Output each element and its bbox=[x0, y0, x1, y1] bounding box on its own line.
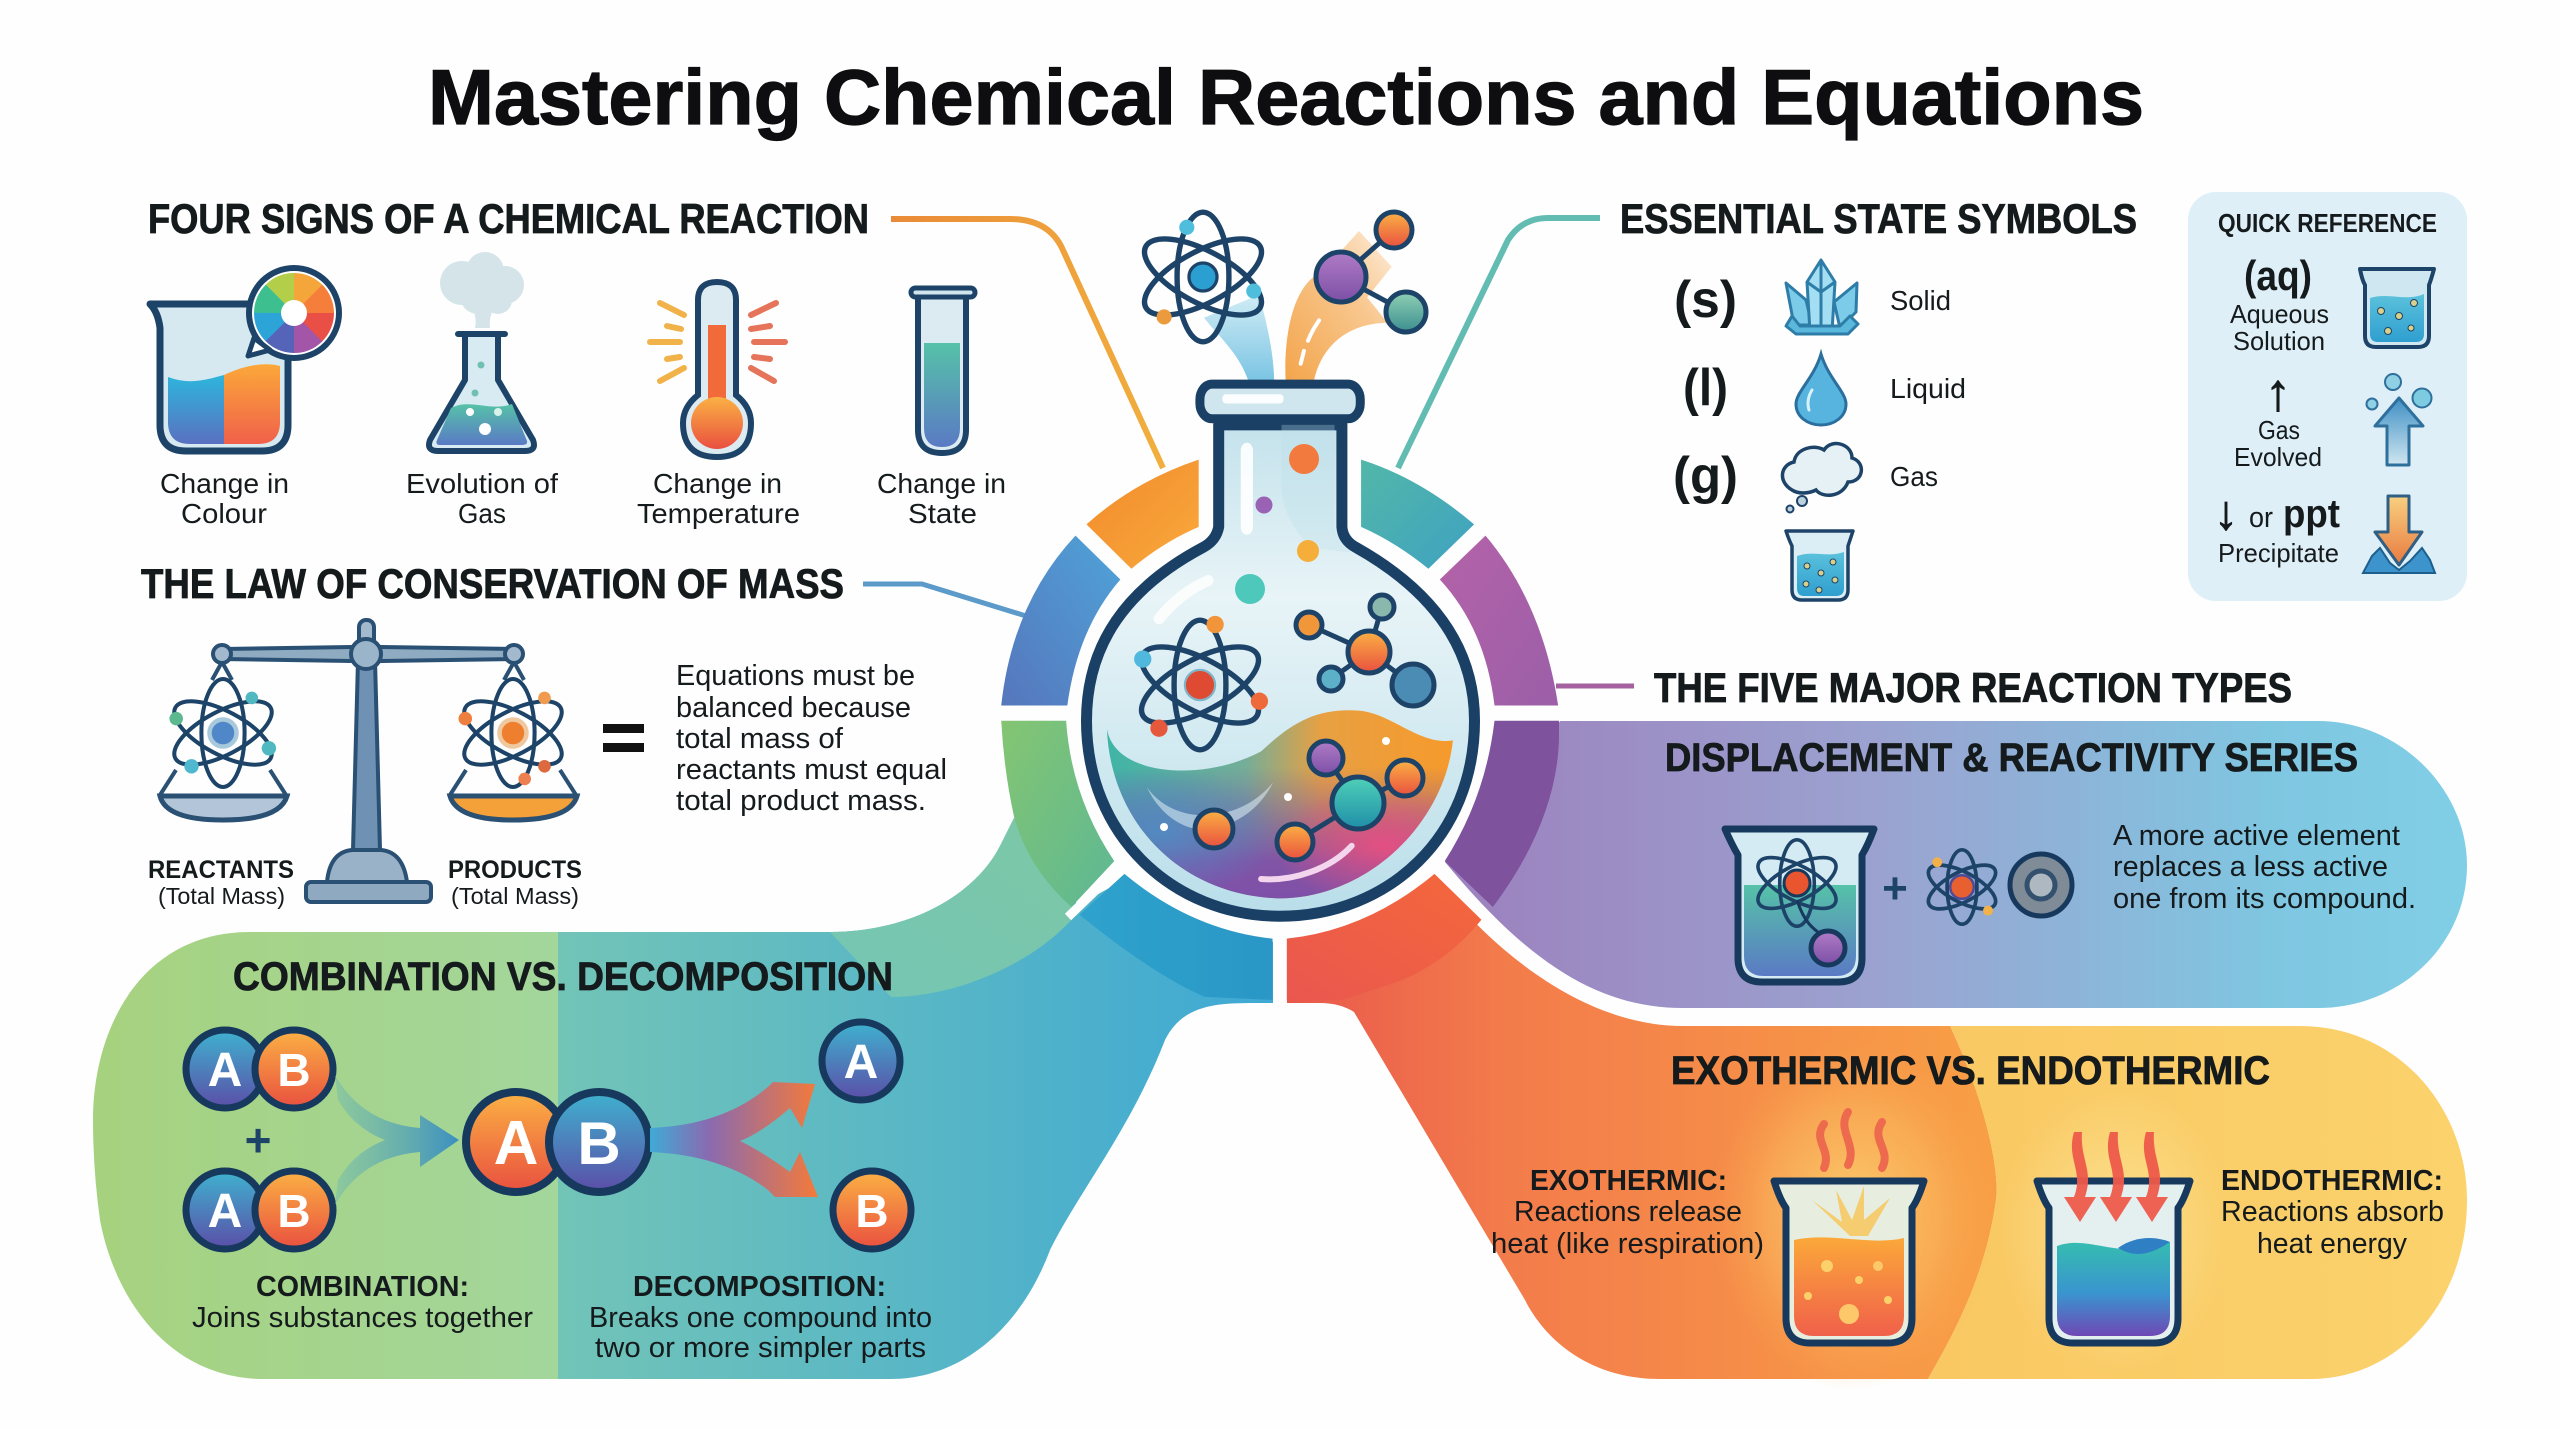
icon: cloud bbox=[1782, 444, 1861, 512]
label: Gas bbox=[458, 498, 506, 529]
gas evolved symbol bbox=[2234, 364, 2322, 472]
endothermic text bbox=[2221, 1165, 2444, 1260]
label: Solid bbox=[1890, 285, 1951, 316]
label: Change in bbox=[653, 468, 782, 499]
description: replaces a less active bbox=[2113, 851, 2388, 883]
precipitate symbol bbox=[2214, 487, 2340, 568]
aqueous symbol: Aqueous bbox=[2230, 299, 2329, 329]
combination text: Joins substances together bbox=[192, 1302, 533, 1334]
precipitate symbol: ppt bbox=[2283, 492, 2340, 536]
exothermic text: Reactions release bbox=[1514, 1196, 1742, 1228]
leader line: reaction types bbox=[1556, 684, 1634, 688]
panel: exothermic vs endothermic bbox=[1287, 876, 2467, 1390]
combination text: COMBINATION: bbox=[256, 1271, 469, 1303]
products label: PRODUCTS bbox=[448, 856, 582, 884]
icon: small aqueous beaker bbox=[1786, 531, 1853, 600]
description: one from its compound. bbox=[2113, 883, 2416, 915]
label: State bbox=[908, 498, 977, 529]
flask liquid bbox=[1107, 710, 1453, 898]
label: Liquid bbox=[1890, 373, 1966, 404]
heading: ESSENTIAL STATE SYMBOLS bbox=[1620, 195, 2137, 242]
icon: crystal bbox=[1786, 260, 1858, 334]
panel: displacement and reactivity series bbox=[1445, 721, 2467, 1008]
segment: orange bbox=[1086, 460, 1199, 569]
reactants label bbox=[148, 856, 294, 909]
flask glass body bbox=[1086, 384, 1475, 916]
icon: precipitate arrow down bbox=[2363, 496, 2435, 573]
heat arrows entering bbox=[2064, 1132, 2168, 1222]
heading: five major reaction types: THE FIVE MAJOR REACTION TYPES bbox=[1654, 664, 2292, 711]
reactants label: REACTANTS bbox=[148, 856, 294, 884]
molecule A right: A bbox=[844, 1036, 878, 1089]
icon: beaker with colour wheel bbox=[150, 268, 339, 451]
precipitate symbol: or bbox=[2249, 502, 2273, 534]
segment: dark purple bbox=[1445, 721, 1559, 907]
molecule pair A B bottom: B bbox=[277, 1185, 311, 1237]
heat waves rising bbox=[1820, 1112, 1885, 1168]
molecule B right bbox=[833, 1171, 911, 1249]
beaker with atom bbox=[1725, 829, 1874, 982]
panel background bbox=[1445, 721, 2467, 1008]
molecule A right bbox=[822, 1022, 900, 1100]
description: A more active element bbox=[2113, 820, 2400, 852]
products label: (Total Mass) bbox=[451, 883, 579, 909]
icon: thermometer with heat rays bbox=[650, 282, 785, 457]
decomposition text: Breaks one compound into bbox=[589, 1302, 932, 1334]
icon: molecule in liquid bbox=[1195, 741, 1423, 860]
exothermic text: EXOTHERMIC: bbox=[1530, 1165, 1727, 1197]
decomposition text: DECOMPOSITION: bbox=[633, 1271, 886, 1303]
section: four signs of a chemical reaction bbox=[148, 195, 1006, 529]
gas evolved symbol: Evolved bbox=[2234, 442, 2322, 472]
panel: combination vs decomposition bbox=[93, 818, 1273, 1379]
molecule pair A B bottom: A bbox=[208, 1185, 242, 1238]
balanced equation explanation: balanced because bbox=[676, 692, 911, 724]
molecule A B centre: A bbox=[494, 1109, 538, 1178]
leader line: state symbols bbox=[1398, 218, 1600, 468]
arrow: splitting bbox=[650, 1082, 818, 1197]
leader line: four signs bbox=[891, 219, 1163, 468]
combination text bbox=[192, 1271, 533, 1334]
heading: QUICK REFERENCE bbox=[2218, 208, 2437, 238]
plus sign: + bbox=[1882, 864, 1908, 913]
icon: flask with gas cloud bbox=[429, 252, 534, 451]
exothermic beaker bbox=[1774, 1181, 1924, 1343]
gas evolved symbol: Gas bbox=[2258, 415, 2300, 445]
precipitate symbol: Precipitate bbox=[2218, 538, 2339, 568]
heading: COMBINATION VS. DECOMPOSITION bbox=[233, 955, 893, 999]
panel background bbox=[93, 818, 1273, 1379]
segment: red bbox=[1287, 874, 1481, 1000]
decomposition text: two or more simpler parts bbox=[595, 1332, 926, 1364]
panel background bbox=[1287, 876, 1997, 1379]
label: Temperature bbox=[637, 498, 800, 529]
segment: blue bbox=[1001, 536, 1120, 706]
reactants label: (Total Mass) bbox=[158, 883, 285, 909]
molecule B right: B bbox=[855, 1185, 889, 1237]
gas evolved symbol: ↑ bbox=[2265, 364, 2291, 422]
precipitate symbol: ↓ bbox=[2214, 487, 2238, 540]
molecule pair A B top bbox=[186, 1030, 333, 1108]
exothermic text: heat (like respiration) bbox=[1491, 1228, 1764, 1260]
molecule pair A B bottom bbox=[186, 1171, 333, 1249]
reaction streams bbox=[1204, 231, 1392, 380]
molecule pair A B top: B bbox=[277, 1044, 311, 1096]
molecule A B centre: B bbox=[577, 1110, 621, 1177]
section: law of conservation of mass bbox=[141, 560, 947, 909]
icon: atom above flask bbox=[1134, 212, 1272, 342]
molecule A B centre bbox=[466, 1092, 649, 1192]
icon: test tube bbox=[911, 288, 975, 453]
aqueous symbol bbox=[2230, 252, 2329, 356]
icon: reactant atom bbox=[165, 679, 281, 787]
icon: water drop bbox=[1796, 354, 1846, 425]
rising bubbles bbox=[1160, 444, 1390, 831]
label: Evolution of bbox=[406, 468, 558, 499]
heading: DISPLACEMENT & REACTIVITY SERIES bbox=[1665, 736, 2358, 780]
icon: atom inside flask bbox=[1131, 616, 1269, 750]
panel background bbox=[2188, 192, 2467, 601]
symbol: gas: (g) bbox=[1673, 447, 1738, 505]
heading: FOUR SIGNS OF A CHEMICAL REACTION bbox=[148, 195, 869, 242]
central ring segments bbox=[1001, 460, 1559, 1000]
icon: gas arrow up bbox=[2366, 374, 2432, 465]
segment: deep blue bbox=[1080, 874, 1273, 1000]
label: Change in bbox=[160, 468, 289, 499]
endothermic text: heat energy bbox=[2257, 1228, 2407, 1260]
endothermic text: Reactions absorb bbox=[2221, 1196, 2444, 1228]
label: Change in bbox=[877, 468, 1006, 499]
molecule pair A B top: A bbox=[208, 1044, 242, 1097]
icon: molecule above flask bbox=[1316, 212, 1426, 332]
icon: molecule inside flask bbox=[1296, 595, 1434, 706]
plus sign: + bbox=[245, 1114, 271, 1166]
exothermic text bbox=[1491, 1165, 1764, 1260]
central flask bbox=[1086, 212, 1475, 916]
decomposition text bbox=[589, 1271, 932, 1364]
segment: teal bbox=[1361, 460, 1474, 569]
icon: product atom bbox=[455, 679, 571, 787]
label: Gas bbox=[1890, 461, 1938, 492]
balanced equation explanation: total mass of bbox=[676, 723, 844, 755]
icon: balance scale bbox=[160, 620, 577, 902]
symbol: solid: (s) bbox=[1674, 271, 1737, 329]
panel: quick reference bbox=[2188, 192, 2467, 601]
balanced equation explanation bbox=[676, 660, 947, 817]
segment: purple bbox=[1440, 536, 1558, 706]
title: Mastering Chemical Reactions and Equations bbox=[428, 53, 2144, 141]
label: Colour bbox=[181, 498, 267, 529]
heading: EXOTHERMIC VS. ENDOTHERMIC bbox=[1671, 1049, 2270, 1093]
endothermic text: ENDOTHERMIC: bbox=[2221, 1165, 2443, 1197]
balanced equation explanation: Equations must be bbox=[676, 660, 915, 692]
symbol: liquid: (l) bbox=[1683, 359, 1728, 417]
atom bbox=[1922, 850, 2002, 924]
section: essential state symbols bbox=[1620, 195, 2137, 600]
balanced equation explanation: total product mass. bbox=[676, 785, 926, 817]
heading: THE LAW OF CONSERVATION OF MASS bbox=[141, 560, 844, 607]
products label bbox=[448, 856, 582, 909]
icon: aqueous beaker bbox=[2360, 269, 2434, 347]
aqueous symbol: (aq) bbox=[2244, 252, 2312, 299]
grey metal disk bbox=[2010, 854, 2072, 916]
segment: green bbox=[1001, 721, 1114, 907]
endothermic beaker bbox=[2037, 1181, 2190, 1343]
description bbox=[2113, 820, 2416, 915]
equals sign bbox=[603, 724, 644, 752]
aqueous symbol: Solution bbox=[2233, 326, 2325, 356]
leader line: law of conservation bbox=[863, 584, 1026, 616]
arrow: combining bbox=[335, 1075, 459, 1205]
balanced equation explanation: reactants must equal bbox=[676, 754, 947, 786]
